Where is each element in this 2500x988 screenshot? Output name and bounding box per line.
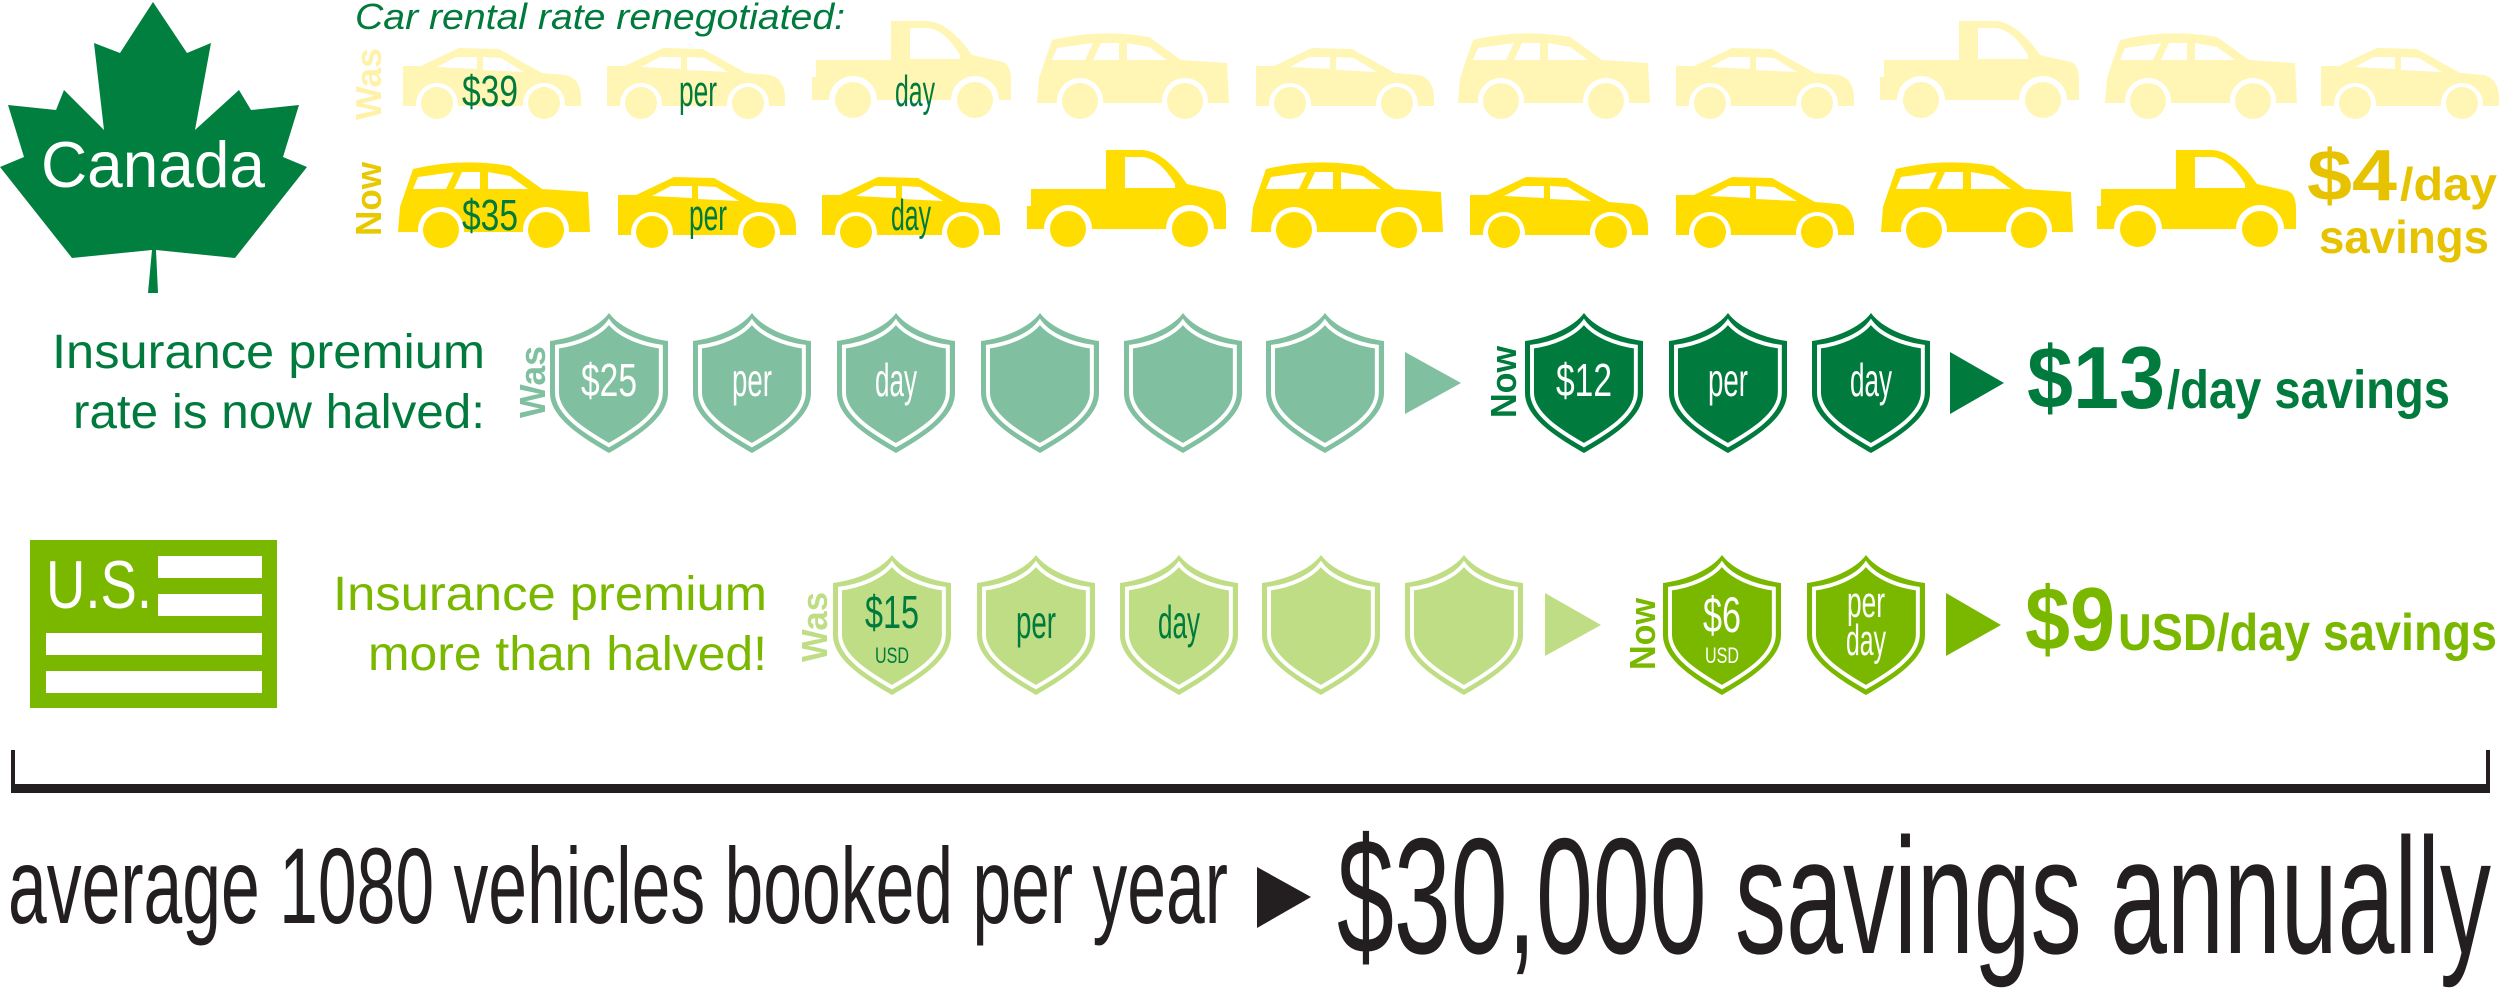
icon: maple leaf Canada: Canada <box>41 128 266 201</box>
row: now cars: per <box>689 191 727 240</box>
row: now cars: day <box>891 191 931 240</box>
row: U.S. now shields <box>1663 555 1925 695</box>
row: U.S. was shields <box>833 555 1523 695</box>
row: Canada now shields: per <box>1708 354 1748 406</box>
row: U.S. now shields: $6 <box>1703 587 1741 643</box>
row: was cars: $39 <box>462 67 518 116</box>
callout: $13/day savings <box>2027 328 2450 427</box>
row: Canada was shields: per <box>732 354 772 406</box>
label: Was (cars): Was <box>348 48 389 120</box>
icon: U.S. flag <box>30 540 277 708</box>
bracket <box>13 750 2488 789</box>
row: was cars: per <box>679 67 717 116</box>
callout: $13/day savings: /day savings <box>2167 360 2450 420</box>
row: Canada now shields: $12 <box>1556 354 1612 406</box>
callout: $9 USD/day savings: $9 <box>2025 570 2115 670</box>
row: Canada now shields: day <box>1850 354 1892 406</box>
callout: $13/day savings: $13 <box>2027 328 2165 427</box>
row: U.S. now shields: per <box>1847 578 1885 627</box>
row: now cars <box>398 150 2296 254</box>
arrow: green <box>1946 593 2001 656</box>
row: Canada now shields <box>1525 313 1930 453</box>
label: Now (cars): Now <box>348 161 389 236</box>
icon: U.S. flag: U.S. <box>46 547 152 623</box>
row: U.S. now shields: USD <box>1705 643 1739 668</box>
row: was cars <box>403 21 2499 125</box>
text: U.S. insurance <box>333 568 767 681</box>
row: now cars: $35 <box>462 191 518 240</box>
icon: maple leaf Canada <box>0 2 307 293</box>
label: Now (U.S. shields): Now <box>1622 597 1663 670</box>
row: U.S. now shields: day <box>1846 616 1886 665</box>
row: was cars: day <box>895 67 935 116</box>
arrow: black <box>1257 867 1311 928</box>
row: Canada was shields: day <box>875 354 917 406</box>
text: Canada insurance: rate is now halved: <box>73 386 485 439</box>
callout: $4/day savings: /day <box>2400 158 2497 210</box>
row: U.S. was shields: day <box>1158 596 1200 648</box>
row: U.S. was shields: per <box>1016 596 1056 648</box>
callout: $4/day savings: savings <box>2319 211 2489 263</box>
text: Canada insurance: Insurance premium <box>52 326 485 379</box>
text: vehicles per year: average 1080 vehicles booked per year <box>8 825 1228 946</box>
text: U.S. insurance: Insurance premium <box>333 568 767 621</box>
label: Now (Canada shields): Now <box>1483 345 1524 418</box>
row: U.S. was shields: USD <box>875 643 909 668</box>
row: Canada was shields <box>550 313 1384 453</box>
label: Was (Canada shields): Was <box>512 346 553 418</box>
callout: $9 USD/day savings <box>2025 570 2497 670</box>
text: Canada insurance <box>52 326 485 439</box>
row: U.S. was shields: $15 <box>865 586 919 638</box>
row: Canada was shields: $25 <box>581 354 637 406</box>
text: U.S. insurance: more than halved! <box>368 628 767 681</box>
callout: $4/day savings: $4 <box>2307 136 2397 216</box>
callout: $4/day savings <box>2307 136 2497 263</box>
arrow: light green <box>1545 593 1601 656</box>
arrow: light teal <box>1405 352 1461 414</box>
arrow: dark green <box>1950 352 2004 414</box>
label: Was (U.S. shields): Was <box>794 592 835 662</box>
